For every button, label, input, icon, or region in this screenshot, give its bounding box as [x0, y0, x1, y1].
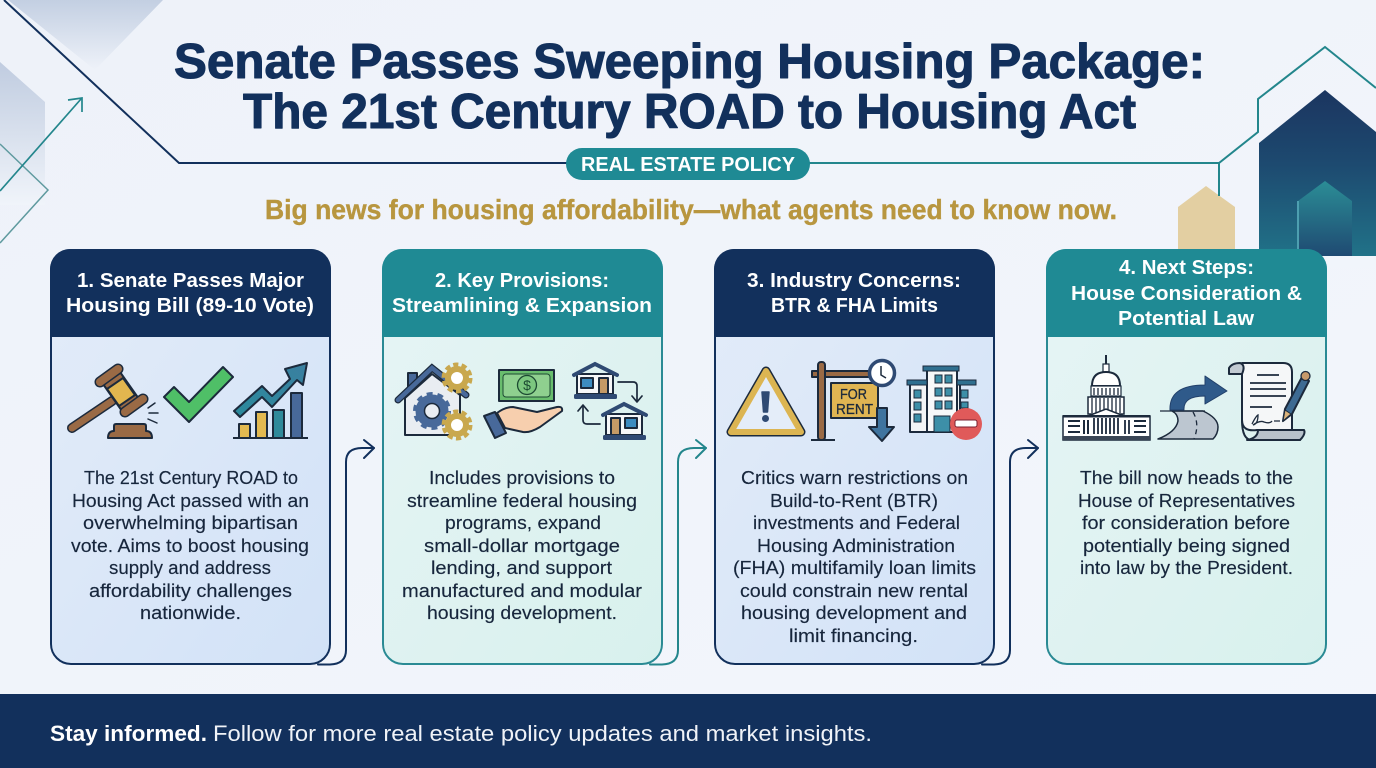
body text 3 [733, 467, 976, 646]
arrow: 1 to 2 [318, 440, 374, 664]
heading 1: Housing Bill (89-10 Vote) [66, 294, 314, 317]
body text 2: small-dollar mortgage [424, 535, 620, 556]
body text 4: potentially being signed [1083, 535, 1290, 556]
panel: 4 Next steps [1046, 249, 1327, 664]
icon: capitol building [1063, 355, 1150, 440]
heading 1 [66, 269, 314, 317]
icon: cash in hand: $ [523, 377, 531, 393]
arrow: 2 to 3 [650, 440, 706, 664]
body text 3: (FHA) multifamily loan limits [733, 557, 976, 578]
icon: house with gears [398, 365, 470, 438]
category pill: REAL ESTATE POLICY [581, 153, 795, 176]
icon: road with arrow [1158, 376, 1227, 439]
heading 2: Streamlining & Expansion [392, 294, 652, 317]
body text 2: Includes provisions to [429, 467, 615, 488]
body text 2 [402, 467, 642, 623]
title: The 21st Century ROAD to Housing Act [243, 85, 1136, 139]
body text 3: limit financing. [789, 625, 918, 646]
body text 1: nationwide. [140, 602, 241, 623]
icon: growth chart [233, 363, 308, 438]
body text 4: The bill now heads to the [1080, 467, 1293, 488]
icon: check mark [164, 367, 233, 422]
body text 1: affordability challenges [89, 580, 292, 601]
body text 2: streamline federal housing [407, 490, 637, 511]
body text 3: could constrain new rental [740, 580, 968, 601]
heading 3: BTR & FHA Limits [771, 294, 938, 317]
body text 1: overwhelming bipartisan [83, 512, 298, 533]
body text 4: for consideration before [1082, 512, 1290, 533]
body text 4: into law by the President. [1080, 557, 1293, 578]
body text 2: lending, and support [431, 557, 612, 578]
body text 4 [1078, 467, 1295, 578]
body text 3: investments and Federal [753, 512, 960, 533]
heading 2: 2. Key Provisions: [435, 269, 609, 292]
subtitle: Big news for housing affordability—what agents need to know now. [265, 194, 1117, 225]
arrow: 3 to 4 [982, 440, 1038, 664]
icon: cash in hand [484, 370, 562, 438]
header rule lines [4, 0, 1376, 196]
body text 1: The 21st Century ROAD to [84, 467, 298, 488]
panel: 3 Industry concerns [714, 249, 995, 664]
heading 4: 4. Next Steps: [1119, 256, 1254, 279]
panel: 2 Key provisions [382, 249, 663, 664]
body text 3: Build-to-Rent (BTR) [770, 490, 938, 511]
category pill [566, 148, 810, 180]
body text 3: housing development and [741, 602, 967, 623]
icon: for rent sign: FOR [840, 386, 867, 403]
body text 4: House of Representatives [1078, 490, 1295, 511]
body text 1: Housing Act passed with an [72, 490, 309, 511]
body text 2: manufactured and modular [402, 580, 642, 601]
icon: exchanging houses [574, 364, 646, 440]
panel: 1 Senate passes [50, 249, 331, 664]
footer text: Stay informed. [50, 721, 207, 746]
icon: warning triangle [731, 371, 801, 432]
title: Senate Passes Sweeping Housing Package: [174, 35, 1205, 89]
icon: signed document [1229, 363, 1310, 440]
body text 1 [71, 467, 309, 623]
heading 3: 3. Industry Concerns: [747, 269, 961, 292]
footer band [0, 694, 1376, 768]
body text 1: supply and address [109, 557, 271, 578]
body text 2: housing development. [427, 602, 617, 623]
background decoration: top-left facets [0, 0, 163, 243]
body text 1: vote. Aims to boost housing [71, 535, 309, 556]
title [174, 35, 1205, 139]
heading 4: Potential Law [1118, 307, 1254, 330]
icon: for rent sign: RENT [836, 401, 873, 418]
background decoration: house shapes [1178, 90, 1376, 268]
icon: apartment building with no sign [907, 366, 982, 440]
heading 4: House Consideration & [1071, 282, 1302, 305]
body text 3: Housing Administration [757, 535, 955, 556]
icon: gavel [72, 369, 158, 438]
body text 3: Critics warn restrictions on [741, 467, 968, 488]
icon: rising arrow [0, 98, 82, 191]
body text 2: programs, expand [445, 512, 601, 533]
heading 2 [392, 269, 652, 317]
heading 1: 1. Senate Passes Major [77, 269, 304, 292]
footer text: Follow for more real estate policy updates and market insights. [213, 721, 872, 746]
icon: for rent sign [811, 360, 894, 441]
heading 3 [747, 269, 961, 317]
heading 4 [1071, 256, 1302, 330]
